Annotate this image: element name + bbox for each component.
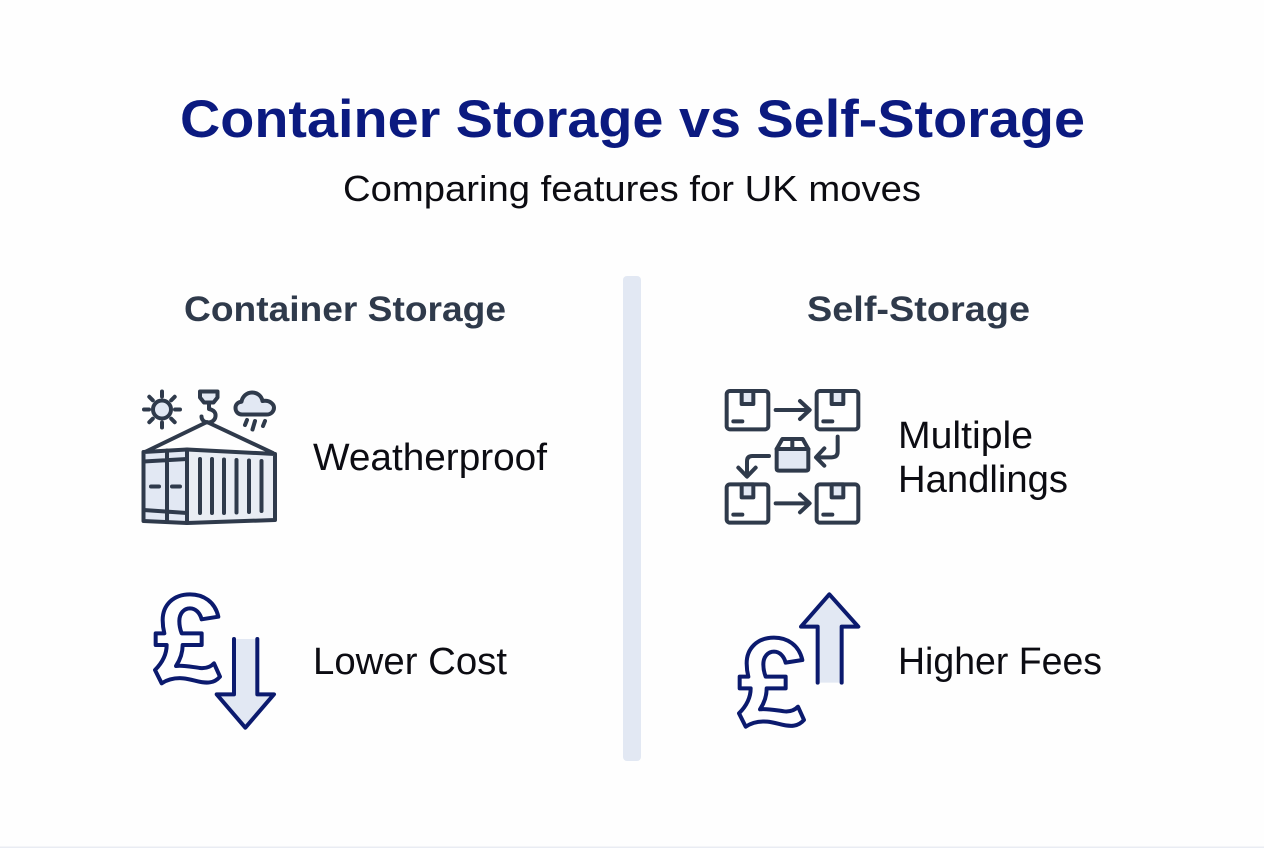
- icon: shipping container with crane hook, sun and rain: [144, 392, 275, 523]
- central divider: [623, 276, 641, 761]
- heading: container storage: Container Storage: [184, 290, 506, 329]
- bottom-left box: [727, 484, 768, 523]
- cloud and rain: [236, 392, 274, 414]
- subtitle: Comparing features for UK moves: [343, 168, 921, 209]
- label: multiple handlings: Handlings: [898, 459, 1068, 501]
- sun: [153, 400, 171, 418]
- label: higher fees: Higher Fees: [898, 641, 1102, 683]
- icon: boxes moved between multiple handlings: [727, 391, 858, 523]
- icon: pound with up arrow: [739, 594, 858, 727]
- pound outline: [739, 638, 804, 727]
- crane hook: [200, 392, 218, 402]
- top-left box: [727, 391, 768, 429]
- panel: self-storage: [727, 290, 1102, 727]
- arrow outline: [801, 594, 858, 683]
- bottom-right box: [817, 484, 858, 523]
- sling: [145, 422, 273, 453]
- panel: container storage: [144, 290, 547, 728]
- arrow fill: [801, 594, 858, 683]
- icon: pound with down arrow: [155, 594, 274, 728]
- pound outline: [155, 594, 220, 683]
- top-right box: [817, 391, 858, 429]
- centre open box: [777, 439, 808, 471]
- arrows: [776, 401, 810, 419]
- container body: [187, 450, 275, 523]
- title: Container Storage vs Self-Storage: [180, 90, 1085, 149]
- label: lower cost: Lower Cost: [313, 641, 507, 683]
- label: multiple handlings: Multiple: [898, 415, 1033, 457]
- arrow fill: [217, 639, 274, 728]
- heading: self-storage: Self-Storage: [807, 290, 1030, 329]
- label: multiple handlings: [898, 415, 1068, 501]
- label: weatherproof: Weatherproof: [313, 437, 547, 479]
- arrow outline: [217, 639, 274, 728]
